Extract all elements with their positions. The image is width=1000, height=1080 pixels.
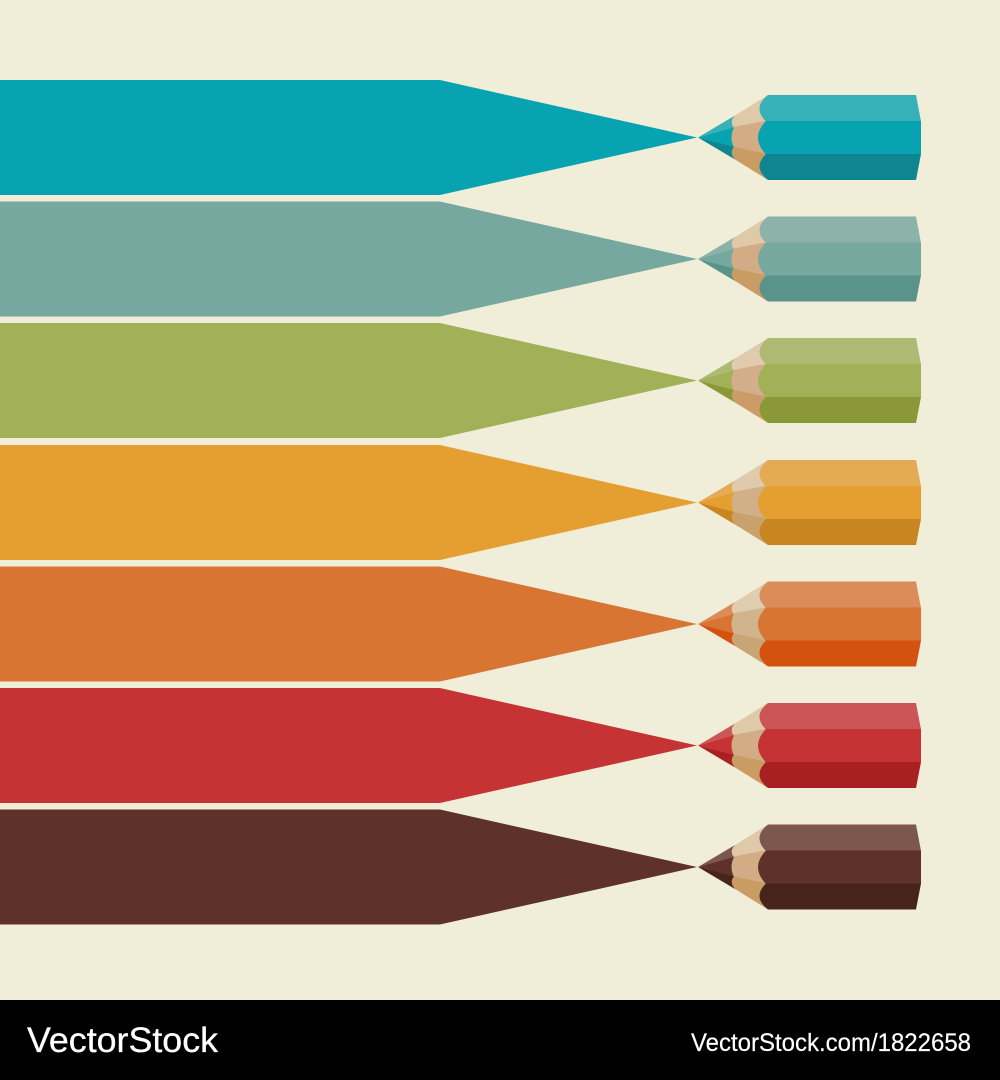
row 3: olive green band and pencil: [0, 323, 921, 438]
pencil: red: [698, 703, 921, 788]
row 4: amber band and pencil: [0, 445, 921, 560]
band: brown: [0, 810, 697, 924]
band: red: [0, 688, 697, 803]
pencil: olive green: [698, 338, 921, 423]
footer bar: [0, 1000, 1000, 1080]
image id text: VectorStock.com/1822658: [691, 1030, 971, 1057]
row 6: red band and pencil: [0, 688, 921, 803]
band: amber: [0, 445, 697, 560]
band: grey-green: [0, 202, 697, 316]
pencil: orange: [698, 582, 921, 666]
pencil: brown: [698, 824, 921, 910]
row 7: brown band and pencil: [0, 810, 921, 924]
band: olive green: [0, 323, 697, 438]
pencil: teal: [698, 95, 921, 180]
logo text: VectorStock: [27, 1020, 218, 1060]
row 1: teal band and pencil: [0, 80, 921, 195]
band: orange: [0, 566, 697, 682]
row 2: grey-green band and pencil: [0, 202, 921, 316]
pencil: amber: [698, 460, 921, 545]
row 5: orange band and pencil: [0, 566, 921, 682]
band: teal: [0, 80, 697, 195]
pencil: grey-green: [698, 216, 921, 302]
